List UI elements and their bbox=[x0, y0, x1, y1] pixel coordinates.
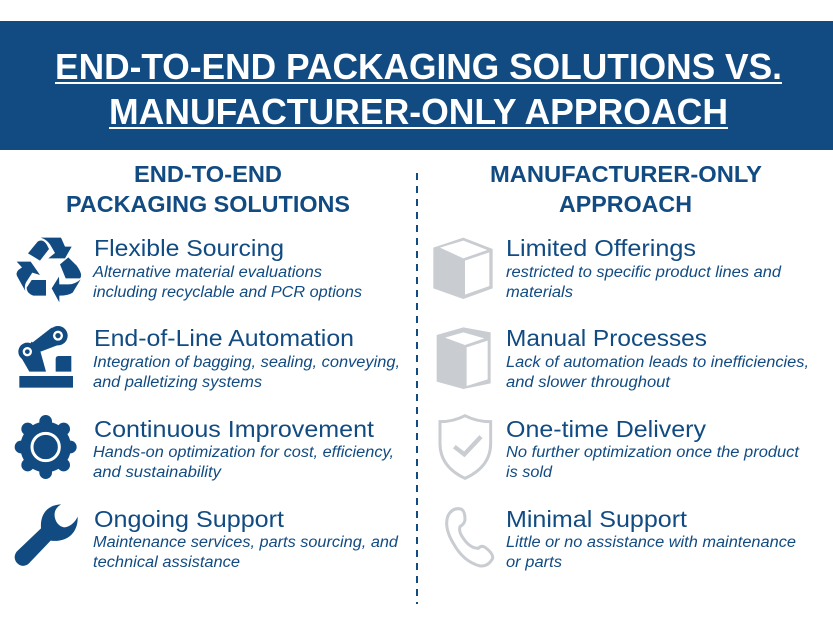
item: One-time Delivery: is sold bbox=[506, 464, 553, 481]
item: Limited Offerings: Limited Offerings bbox=[506, 235, 696, 261]
left column heading bbox=[66, 161, 350, 217]
right column heading: MANUFACTURER-ONLY bbox=[490, 161, 762, 187]
item: Ongoing Support: Ongoing Support bbox=[94, 506, 285, 532]
item: Flexible Sourcing: Alternative material evaluations bbox=[92, 264, 322, 281]
icon: robot arm bbox=[18, 326, 73, 388]
item: End-of-Line Automation: Integration of bagging, sealing, conveying, bbox=[93, 354, 400, 371]
item: One-time Delivery bbox=[506, 416, 800, 481]
item: Manual Processes: Lack of automation leads to inefficiencies, bbox=[506, 354, 809, 371]
item: Manual Processes bbox=[506, 325, 809, 391]
left column heading: END-TO-END bbox=[134, 161, 282, 187]
icon: wrench bbox=[15, 504, 78, 566]
item: Continuous Improvement bbox=[93, 416, 394, 481]
right column heading: APPROACH bbox=[559, 191, 692, 217]
item: Ongoing Support bbox=[93, 506, 399, 571]
item: Limited Offerings: restricted to specific product lines and bbox=[506, 264, 782, 281]
icon: shield check bbox=[440, 416, 491, 478]
item: Flexible Sourcing: including recyclable and PCR options bbox=[93, 284, 362, 301]
item: Minimal Support: Little or no assistance with maintenance bbox=[506, 534, 796, 551]
item: Minimal Support: or parts bbox=[506, 554, 562, 571]
item: End-of-Line Automation: End-of-Line Automation bbox=[94, 325, 354, 351]
icon: phone bbox=[447, 509, 493, 566]
item: Flexible Sourcing: Flexible Sourcing bbox=[94, 235, 284, 261]
right column heading bbox=[490, 161, 762, 217]
icon: recycle bbox=[17, 238, 81, 302]
item: End-of-Line Automation: and palletizing systems bbox=[93, 374, 262, 391]
item: Ongoing Support: Maintenance services, parts sourcing, and bbox=[93, 534, 399, 551]
item: Continuous Improvement: and sustainability bbox=[93, 464, 222, 481]
item: One-time Delivery: One-time Delivery bbox=[506, 416, 706, 442]
item: One-time Delivery: No further optimization once the product bbox=[506, 444, 800, 461]
item: Minimal Support: Minimal Support bbox=[506, 506, 687, 532]
item: Manual Processes: and slower throughout bbox=[506, 374, 671, 391]
title: END-TO-END PACKAGING SOLUTIONS VS. bbox=[55, 46, 782, 87]
item: Flexible Sourcing bbox=[92, 235, 362, 301]
icon: rough box bbox=[437, 327, 491, 389]
title: MANUFACTURER-ONLY APPROACH bbox=[109, 91, 728, 132]
item: Continuous Improvement: Hands-on optimization for cost, efficiency, bbox=[93, 444, 394, 461]
icon: open box bbox=[433, 238, 493, 299]
item: Minimal Support bbox=[506, 506, 796, 571]
header banner bbox=[0, 21, 833, 150]
left column heading: PACKAGING SOLUTIONS bbox=[66, 191, 350, 217]
item: Limited Offerings bbox=[506, 235, 782, 301]
item: Limited Offerings: materials bbox=[506, 284, 573, 301]
item: Continuous Improvement: Continuous Improvement bbox=[94, 416, 374, 442]
title bbox=[55, 46, 782, 132]
item: Ongoing Support: technical assistance bbox=[93, 554, 240, 571]
item: Manual Processes: Manual Processes bbox=[506, 325, 707, 351]
item: End-of-Line Automation bbox=[93, 325, 400, 391]
icon: gear bbox=[20, 421, 71, 473]
